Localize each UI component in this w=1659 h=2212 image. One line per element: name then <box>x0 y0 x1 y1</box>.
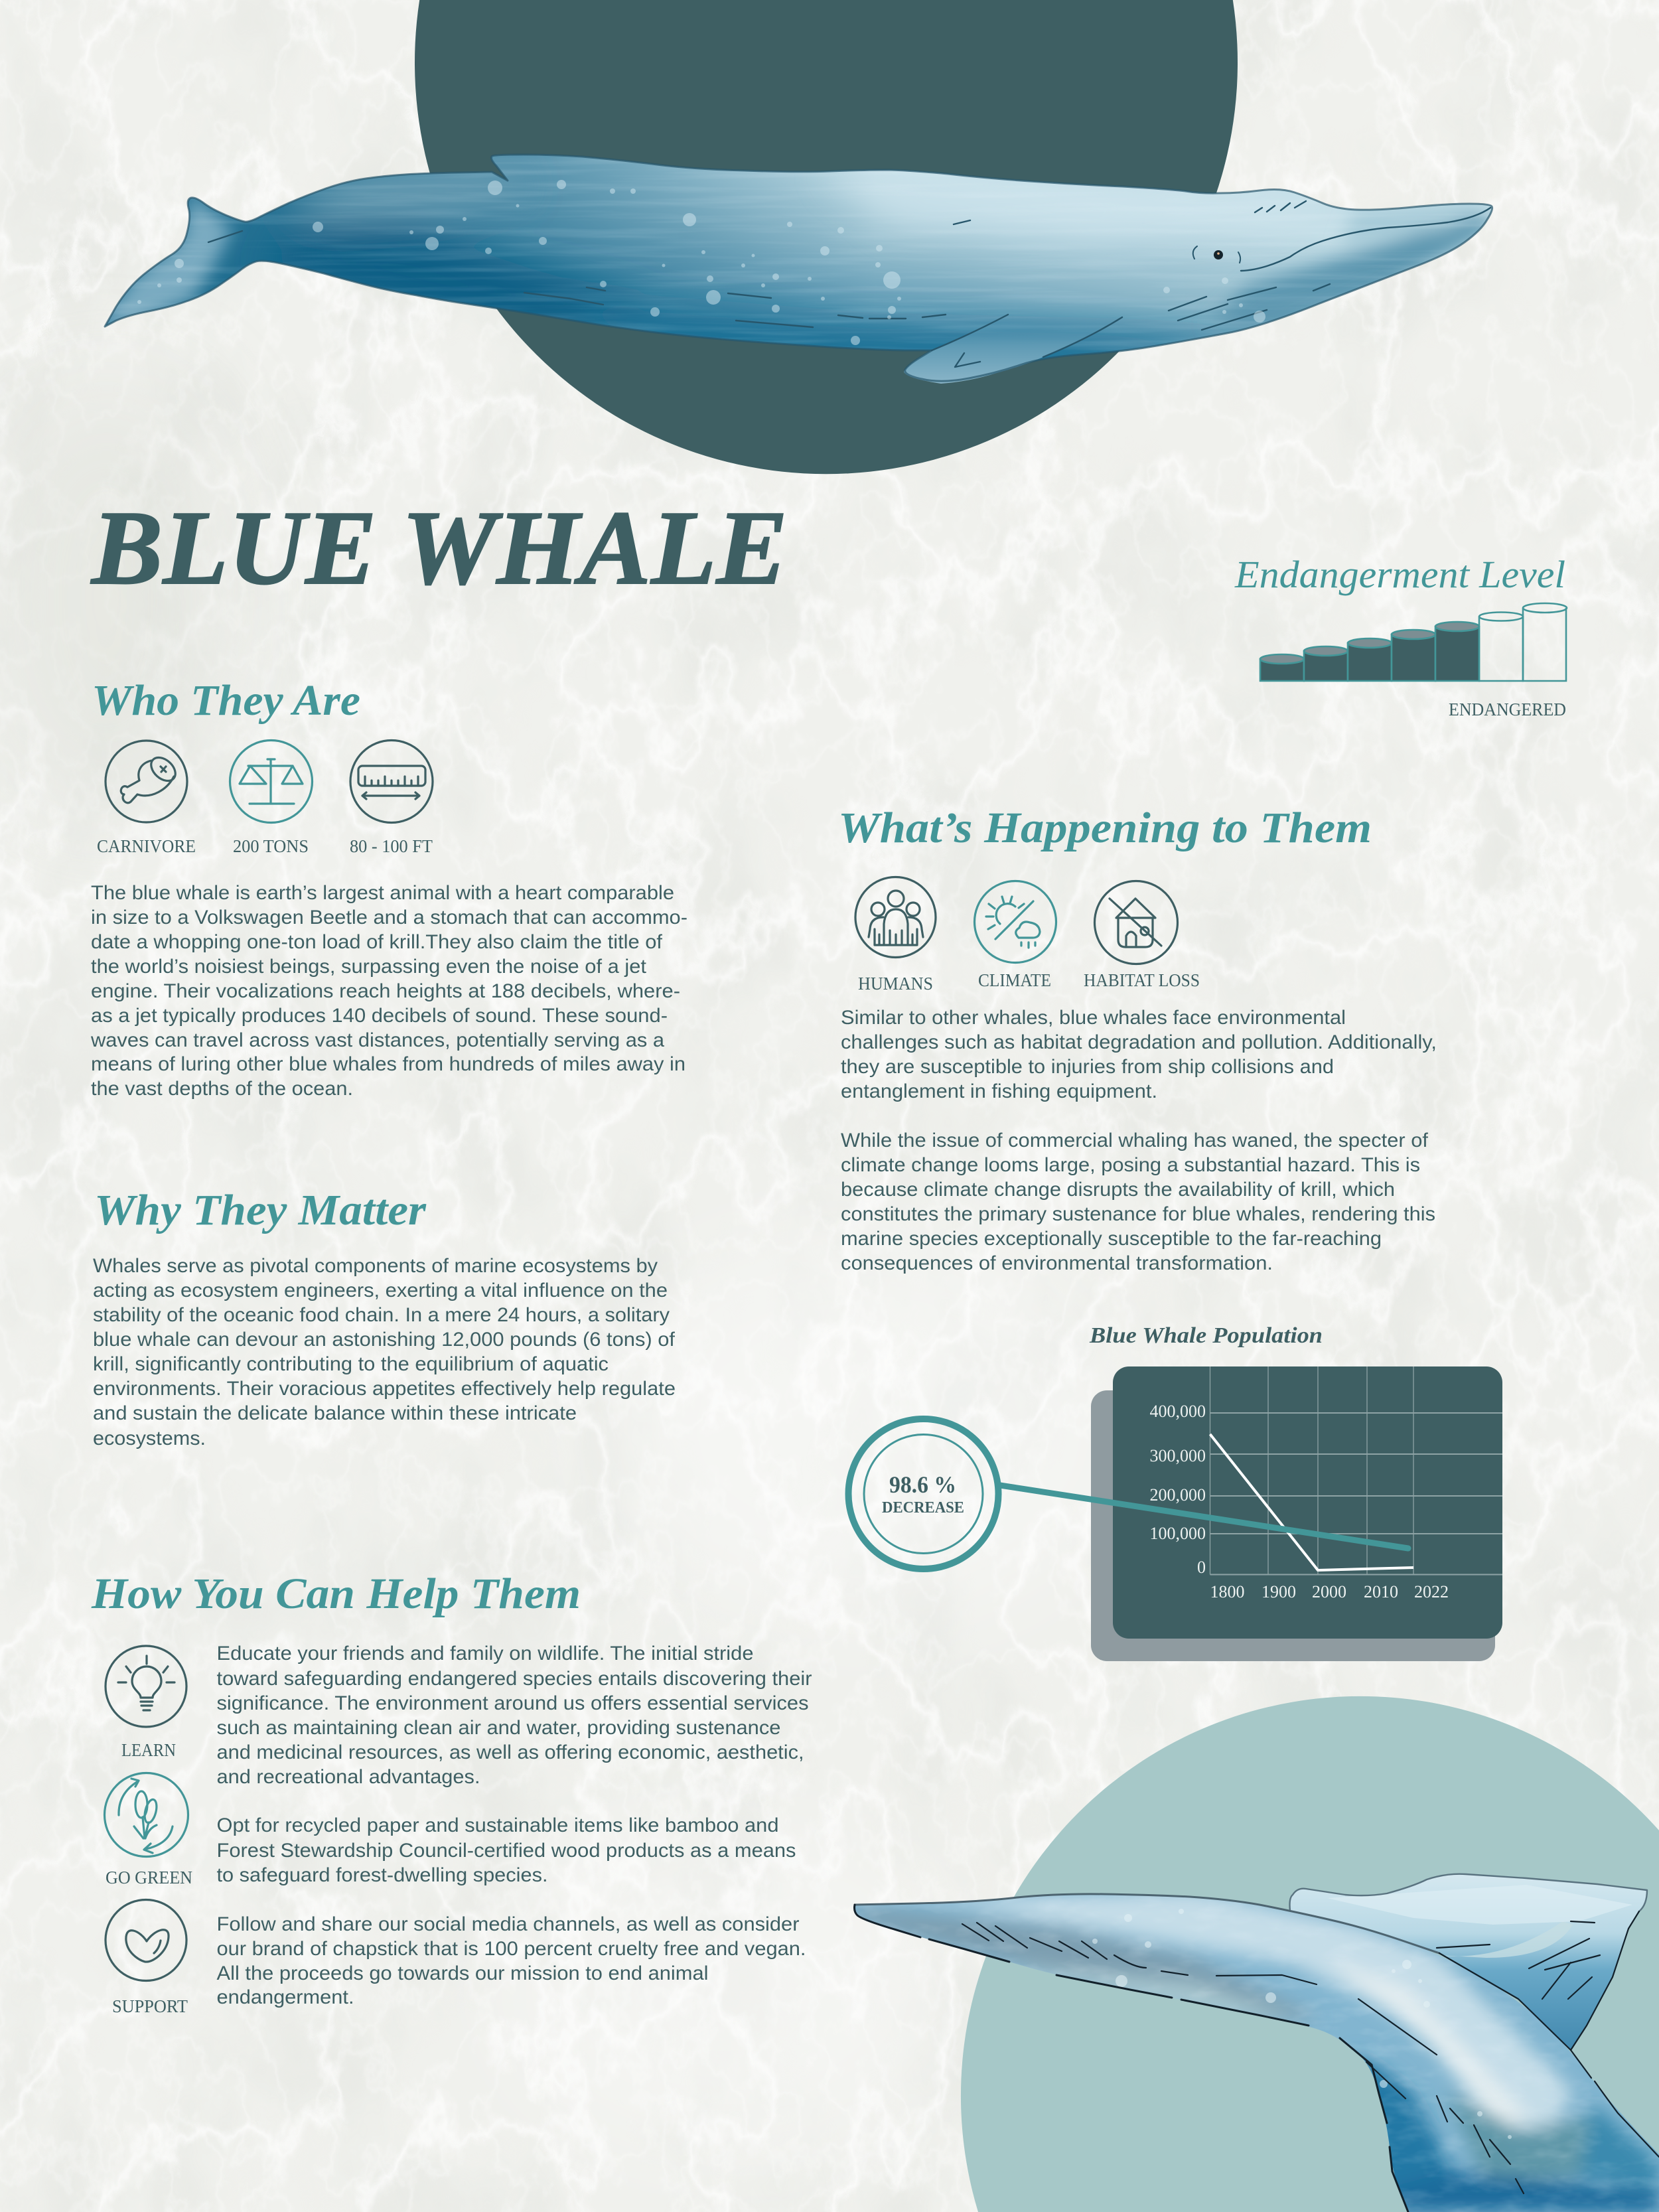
text block: who they are <box>90 882 687 1100</box>
teal circle behind tail <box>961 1696 1659 2212</box>
text block: why they matter: ecosystems. <box>93 1428 206 1449</box>
panel: endangerment level <box>1234 553 1567 719</box>
icon: go green <box>105 1773 188 1857</box>
whale outline <box>105 155 1492 381</box>
text block: what's happening to them <box>841 1007 1437 1274</box>
callout: decrease <box>848 1419 998 1569</box>
label: learn: LEARN <box>121 1740 176 1760</box>
text block: why they matter: Whales serve as pivotal components of marine ecosystems by <box>93 1255 658 1277</box>
text block: why they matter <box>93 1255 676 1449</box>
text block: what's happening to them: marine species exceptionally susceptible to the far-reaching <box>841 1228 1382 1250</box>
text block: why they matter: blue whale can devour an astonishing 12,000 pounds (6 tons) of <box>93 1329 676 1351</box>
x axis labels: 2000 <box>1312 1582 1346 1601</box>
y axis labels: 400,000 <box>1149 1402 1206 1421</box>
population line <box>1210 1434 1413 1570</box>
text block: who they are: the vast depths of the ocean. <box>91 1078 353 1100</box>
text block: go green <box>216 1814 796 1886</box>
text block: what's happening to them: they are susceptible to injuries from ship collisions and <box>841 1056 1334 1078</box>
front fluke and body <box>849 1868 1659 2212</box>
icon: support <box>106 1899 186 1980</box>
x axis labels: 2022 <box>1414 1582 1449 1601</box>
text block: learn: and medicinal resources, as well as offering economic, aesthetic, <box>216 1741 804 1763</box>
icon: learn <box>106 1646 186 1727</box>
label: habitat loss: HABITAT LOSS <box>1084 970 1200 990</box>
text block: go green: Opt for recycled paper and sustainable items like bamboo and <box>216 1814 779 1836</box>
text block: learn: and recreational advantages. <box>216 1766 480 1788</box>
rear fluke <box>1290 1874 1646 2049</box>
label: carnivore: CARNIVORE <box>97 836 196 856</box>
label: endangered: ENDANGERED <box>1449 700 1566 719</box>
text block: go green: Forest Stewardship Council-certified wood products as a means <box>216 1840 796 1862</box>
icon: humans <box>855 877 936 957</box>
panel: why they matter <box>93 1186 676 1449</box>
icon: ruler <box>350 741 433 823</box>
text block: why they matter: stability of the oceanic food chain. In a mere 24 hours, a solitary <box>93 1304 670 1326</box>
text block: what's happening to them: consequences of environmental transformation. <box>841 1252 1273 1274</box>
y axis labels: 0 <box>1197 1558 1206 1577</box>
tail markings <box>962 1923 1524 2193</box>
text block: support: Follow and share our social media channels, as well as consider <box>216 1913 800 1935</box>
label: support: SUPPORT <box>112 1996 188 2016</box>
heading: why they matter: Why They Matter <box>94 1186 427 1234</box>
x axis labels: 2010 <box>1364 1582 1398 1601</box>
text block: what's happening to them: Similar to other whales, blue whales face environmental <box>841 1007 1346 1029</box>
text block: what's happening to them: because climate change disrupts the availability of krill, which <box>841 1179 1395 1201</box>
label: 200 tons: 200 TONS <box>233 836 309 856</box>
heading: how you can help them: How You Can Help Them <box>91 1570 581 1618</box>
whale spots <box>137 180 1265 345</box>
y axis labels: 300,000 <box>1149 1446 1206 1465</box>
label: 80 - 100 ft: 80 - 100 FT <box>350 836 433 856</box>
label: humans: HUMANS <box>858 974 933 994</box>
text block: learn: significance. The environment around us offers essential services <box>216 1692 808 1714</box>
illustration: blue whale <box>93 146 1506 392</box>
title: BLUE WHALE <box>90 488 788 607</box>
text block: learn: Educate your friends and family on wildlife. The initial stride <box>216 1643 754 1664</box>
chart panel <box>1113 1366 1502 1639</box>
flipper <box>904 315 1122 384</box>
label: climate: CLIMATE <box>978 970 1051 990</box>
y axis labels: 100,000 <box>1149 1524 1206 1543</box>
icon: carnivore <box>106 741 187 822</box>
heading: endangerment level: Endangerment Level <box>1234 553 1565 596</box>
whale markings <box>208 201 1490 367</box>
panel: blue whale population chart <box>848 1323 1502 1661</box>
callout: decrease: 98.6 % <box>889 1471 956 1498</box>
text block: go green: to safeguard forest-dwelling species. <box>216 1864 548 1886</box>
tail outline <box>855 1894 1439 1953</box>
text block: learn: toward safeguarding endangered species entails discovering their <box>216 1668 812 1690</box>
text block: why they matter: krill, significantly contributing to the equilibrium of aquatic <box>93 1353 609 1375</box>
illustration: whale tail <box>849 1868 1659 2212</box>
y axis labels <box>1149 1402 1206 1577</box>
heading: who they are: Who They Are <box>92 676 360 725</box>
text block: learn: such as maintaining clean air and water, providing sustenance <box>216 1717 780 1739</box>
text block: who they are: date a whopping one-ton load of krill.They also claim the title of <box>91 931 663 953</box>
text block: who they are: The blue whale is earth’s largest animal with a heart comparable <box>91 882 674 904</box>
panel: what's happening to them <box>838 804 1437 1274</box>
icon: climate <box>974 881 1056 962</box>
chart: endangerment cylinders <box>1260 603 1567 681</box>
text block: support <box>216 1913 806 2008</box>
text block: support: endangerment. <box>216 1986 354 2008</box>
text block: who they are: means of luring other blue whales from hundreds of miles away in <box>91 1053 685 1075</box>
text block: who they are: as a jet typically produces 140 decibels of sound. These sound- <box>91 1005 668 1027</box>
text block: learn <box>216 1643 812 1788</box>
text block: support: our brand of chapstick that is 100 percent cruelty free and vegan. <box>216 1938 806 1960</box>
panel: how you can help them <box>91 1570 812 2016</box>
heading: what's happening to them: What’s Happening to Them <box>838 804 1372 852</box>
text block: why they matter: acting as ecosystem engineers, exerting a vital influence on the <box>93 1280 668 1301</box>
icon: scale <box>230 741 312 823</box>
text block: support: All the proceeds go towards our mission to end animal <box>216 1962 709 1984</box>
x axis labels: 1800 <box>1210 1582 1245 1601</box>
text block: what's happening to them: challenges such as habitat degradation and pollution. Additionally, <box>841 1031 1437 1053</box>
text block: who they are: in size to a Volkswagen Beetle and a stomach that can accommo- <box>91 907 687 928</box>
chart shadow <box>1091 1390 1495 1661</box>
text block: what's happening to them: constitutes the primary sustenance for blue whales, rendering this <box>841 1203 1435 1225</box>
panel: who they are <box>90 676 687 1100</box>
dark circle behind whale <box>415 0 1238 474</box>
x axis labels <box>1210 1582 1449 1601</box>
icon: habitat loss <box>1095 881 1177 964</box>
callout: decrease: DECREASE <box>882 1499 964 1516</box>
text block: who they are: engine. Their vocalizations reach heights at 188 decibels, where- <box>91 980 680 1002</box>
text block: who they are: the world’s noisiest beings, surpassing even the noise of a jet <box>91 956 646 978</box>
x axis labels: 1900 <box>1262 1582 1296 1601</box>
text block: what's happening to them: entanglement in fishing equipment. <box>841 1080 1157 1102</box>
text block: what's happening to them: climate change looms large, posing a substantial hazard. This is <box>841 1154 1420 1176</box>
heading: chart title: Blue Whale Population <box>1089 1323 1323 1348</box>
text block: who they are: waves can travel across vast distances, potentially serving as a <box>90 1029 665 1051</box>
text block: why they matter: and sustain the delicate balance within these intricate <box>93 1402 577 1424</box>
label: go green: GO GREEN <box>106 1868 192 1887</box>
text block: what's happening to them: While the issue of commercial whaling has waned, the specter of <box>841 1130 1429 1151</box>
whale eye <box>1193 246 1240 263</box>
y axis labels: 200,000 <box>1149 1485 1206 1505</box>
text block: why they matter: environments. Their voracious appetites effectively help regulate <box>93 1378 676 1400</box>
callout connector <box>1000 1485 1408 1548</box>
